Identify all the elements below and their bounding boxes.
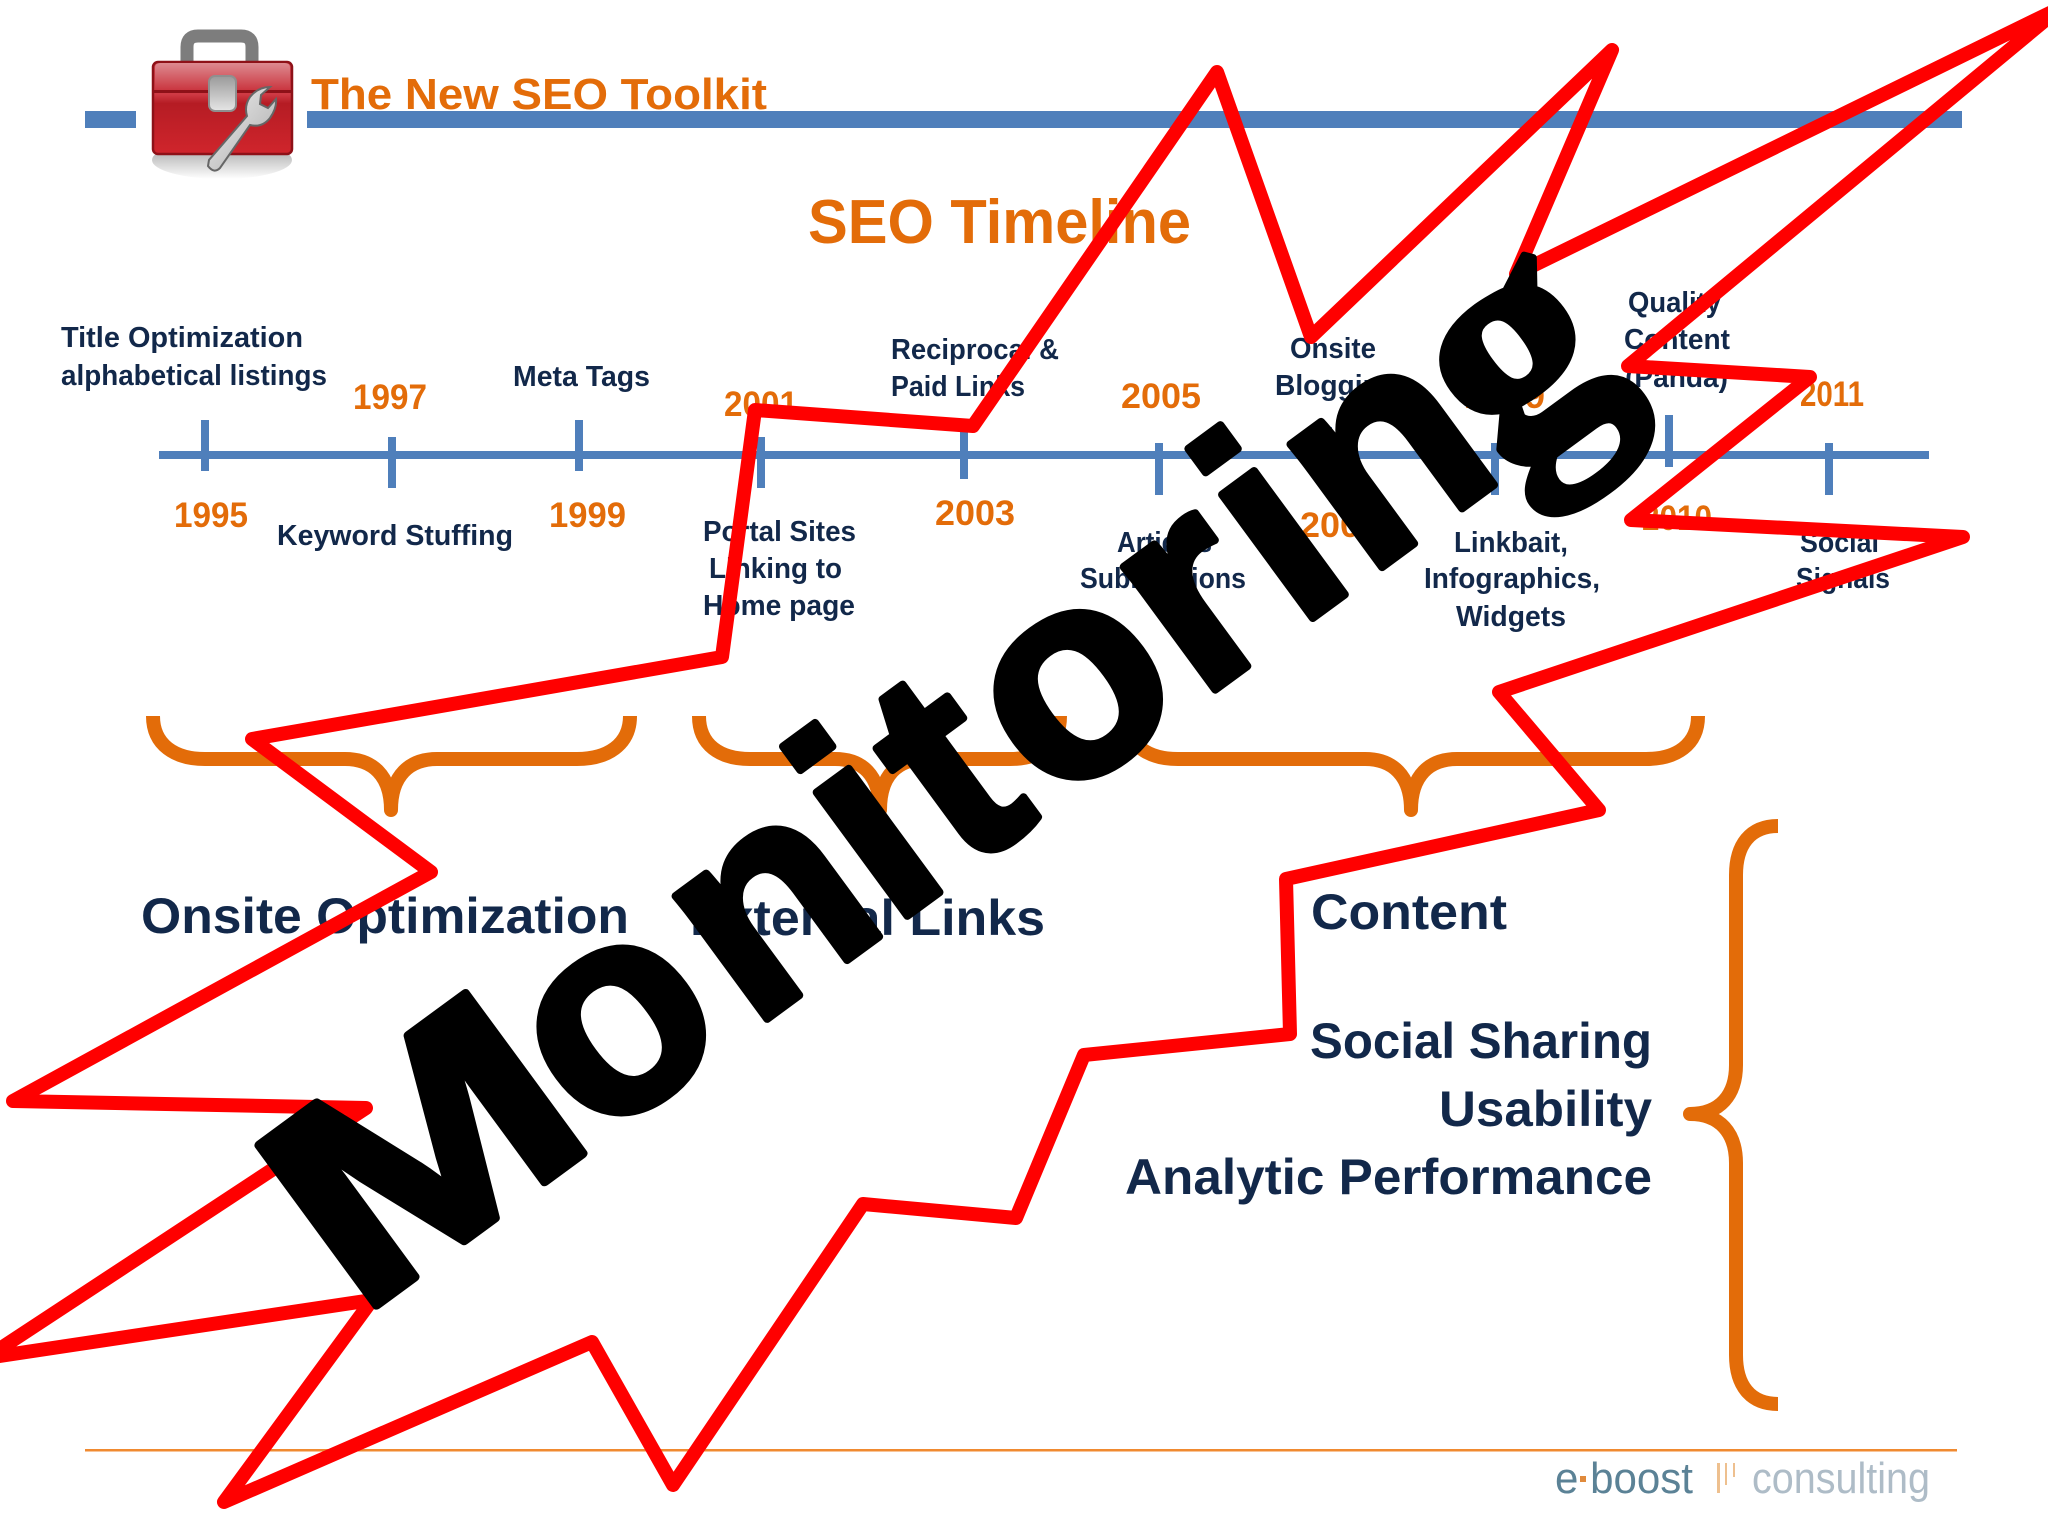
- timeline years: 2003: [935, 494, 1015, 533]
- title: The New SEO Toolkit: The New SEO Toolkit: [311, 70, 767, 119]
- timeline event labels: [61, 287, 1890, 633]
- timeline event labels: Home page: [703, 590, 855, 622]
- timeline event labels: Onsite: [1290, 333, 1376, 365]
- monitoring label: onitorin: [440, 263, 1545, 1195]
- footer rule: [85, 1449, 1957, 1452]
- timeline event labels: Keyword Stuffing: [277, 520, 513, 552]
- timeline event labels: Linkbait,: [1454, 527, 1568, 559]
- heading: SEO Timeline: SEO Timeline: [808, 188, 1191, 257]
- section labels: Analytic Performance: [1125, 1149, 1652, 1205]
- section labels: [141, 884, 1652, 1205]
- timeline event labels: Widgets: [1456, 601, 1566, 633]
- section labels: Onsite Optimization: [141, 888, 629, 944]
- footer logo: e-boost consulting: e boost: [1555, 1454, 1693, 1503]
- timeline event labels: Social: [1800, 527, 1879, 559]
- timeline event labels: Meta Tags: [513, 361, 650, 393]
- timeline years: 2005: [1121, 377, 1201, 416]
- timeline event labels: Articles: [1117, 527, 1212, 559]
- timeline event labels: Reciprocal &: [891, 334, 1059, 366]
- monitoring label: g: [1332, 149, 1680, 539]
- section labels: Content: [1311, 884, 1507, 940]
- footer logo: e-boost consulting: consulting: [1752, 1454, 1930, 1503]
- timeline years: 2010: [1642, 499, 1712, 538]
- timeline event labels: Title Optimization: [61, 322, 303, 354]
- icon: red toolbox with wrench: [152, 36, 292, 179]
- timeline years: 2001: [724, 385, 798, 424]
- timeline event labels: Portal Sites: [703, 516, 856, 548]
- timeline years: 2011: [1800, 375, 1864, 414]
- timeline event labels: alphabetical listings: [61, 360, 327, 392]
- section labels: Social Sharing: [1310, 1013, 1652, 1069]
- timeline event labels: Infographics,: [1424, 563, 1600, 595]
- timeline event labels: Quality: [1628, 287, 1721, 319]
- timeline years: 1999: [549, 496, 626, 535]
- timeline event labels: Linking to: [709, 553, 842, 585]
- timeline event labels: Content: [1624, 324, 1730, 356]
- timeline event labels: Signals: [1796, 563, 1890, 595]
- timeline event labels: Blogging: [1275, 370, 1397, 402]
- timeline event labels: Paid Links: [891, 371, 1025, 403]
- section labels: Usability: [1439, 1081, 1652, 1137]
- timeline years: 2007: [1300, 506, 1380, 545]
- timeline years: 2009: [1465, 377, 1545, 416]
- footer logo: e-boost consulting: [1555, 1454, 1930, 1503]
- timeline years: [174, 375, 1864, 545]
- timeline years: 1997: [353, 378, 427, 417]
- header bar: [85, 111, 1962, 128]
- orange curly braces under timeline: [153, 716, 1698, 810]
- timeline axis with ticks: [159, 415, 1929, 495]
- monitoring label: M: [202, 929, 639, 1370]
- timeline event labels: Submissions: [1080, 563, 1246, 595]
- timeline event labels: (Panda): [1625, 362, 1728, 394]
- large orange brace: [1690, 826, 1778, 1404]
- timeline years: 1995: [174, 496, 248, 535]
- section labels: External Links: [690, 890, 1045, 946]
- monitoring label: [186, 149, 1680, 1381]
